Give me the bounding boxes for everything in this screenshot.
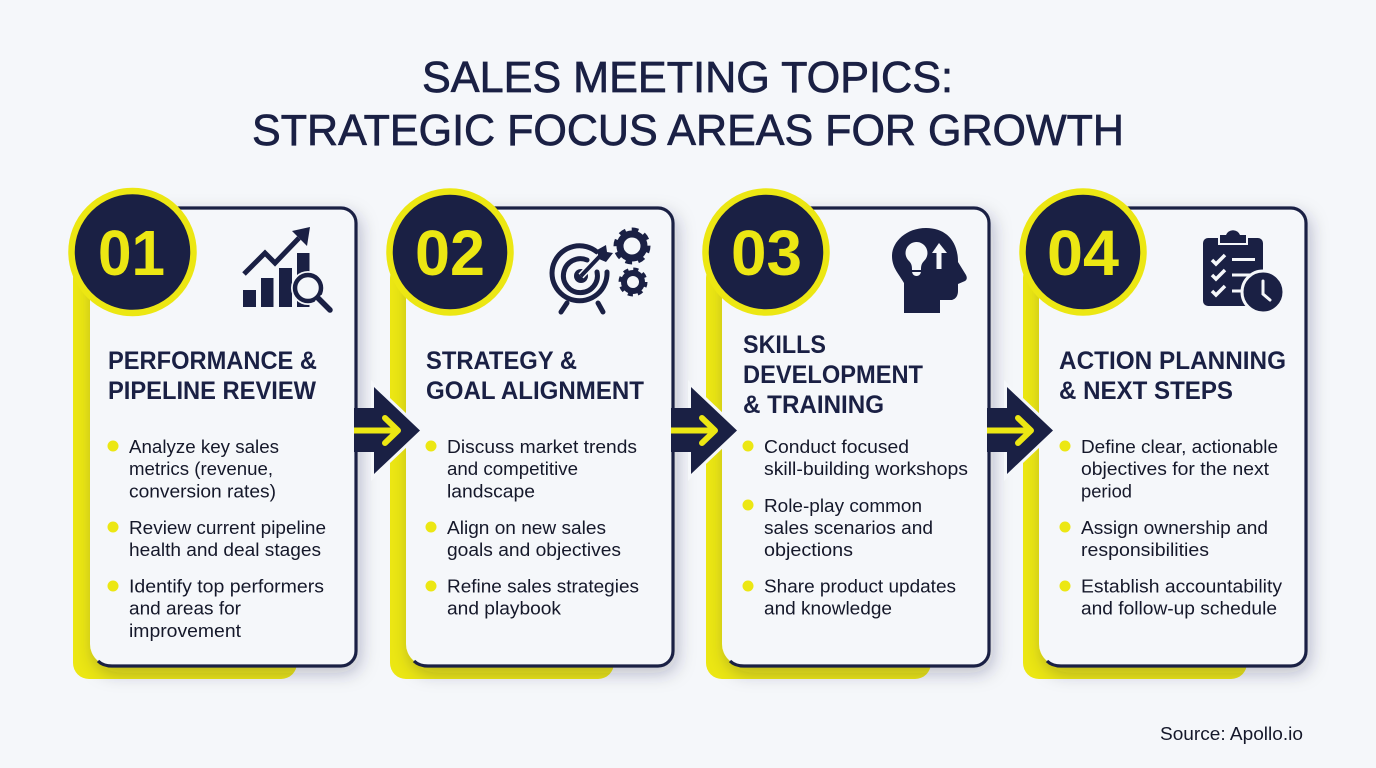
bullet list: Refine sales strategies bbox=[447, 576, 639, 596]
bullet list: Assign ownership and bbox=[1081, 517, 1268, 538]
bullet list: Analyze key sales bbox=[129, 436, 279, 457]
bullet list bbox=[108, 436, 326, 641]
bullet list: and areas for bbox=[129, 598, 241, 618]
heading: & NEXT STEPS bbox=[1059, 377, 1233, 405]
heading: SKILLS bbox=[743, 331, 826, 359]
icon: chart and magnifier bbox=[243, 227, 330, 310]
bullet list: improvement bbox=[129, 620, 241, 641]
card outline bbox=[1047, 208, 1306, 666]
title: SALES MEETING TOPICS: bbox=[422, 53, 953, 102]
heading bbox=[1059, 347, 1286, 405]
bullet list: landscape bbox=[447, 480, 535, 502]
bullet list: Align on new sales bbox=[447, 517, 606, 538]
number badge 01 bbox=[72, 191, 194, 313]
number badge 03 bbox=[706, 192, 826, 312]
panel: 04 action planning and next steps bbox=[1022, 192, 1306, 679]
bullet list: sales scenarios and bbox=[764, 517, 933, 538]
heading: ACTION PLANNING bbox=[1059, 347, 1286, 375]
bullet list: goals and objectives bbox=[447, 539, 621, 560]
bullet list: skill-building workshops bbox=[764, 458, 968, 479]
card outline bbox=[414, 208, 673, 666]
panel: 03 skills development and training bbox=[706, 192, 989, 679]
heading bbox=[426, 347, 644, 405]
bullet list: and follow-up schedule bbox=[1081, 598, 1277, 618]
title: STRATEGIC FOCUS AREAS FOR GROWTH bbox=[252, 106, 1124, 155]
bullet list bbox=[742, 436, 968, 618]
yellow backing strip bbox=[73, 262, 297, 679]
number badge 04 bbox=[1022, 192, 1144, 312]
number badge 01: 01 bbox=[98, 217, 165, 289]
heading: PERFORMANCE & bbox=[108, 347, 317, 375]
title bbox=[252, 53, 1124, 155]
icon: clipboard and clock bbox=[1203, 230, 1284, 313]
yellow backing strip bbox=[706, 262, 931, 679]
heading: DEVELOPMENT bbox=[743, 361, 923, 389]
number badge 03: 03 bbox=[731, 217, 802, 289]
heading: PIPELINE REVIEW bbox=[108, 377, 316, 405]
heading: STRATEGY & bbox=[426, 347, 577, 375]
card body bbox=[406, 207, 673, 666]
bullet list: objections bbox=[764, 539, 853, 560]
bullet list: Share product updates bbox=[764, 576, 956, 596]
card body bbox=[722, 207, 989, 666]
bullet list: objectives for the next bbox=[1081, 458, 1269, 479]
source note: Source: Apollo.io bbox=[1160, 724, 1303, 744]
bullet list: metrics (revenue, bbox=[129, 458, 273, 479]
bullet list: responsibilities bbox=[1081, 539, 1209, 560]
bullet list: Discuss market trends bbox=[447, 436, 637, 457]
card body bbox=[90, 207, 356, 666]
card outline bbox=[98, 208, 356, 666]
bullet list: and playbook bbox=[447, 598, 562, 618]
bullet list: Identify top performers bbox=[129, 576, 324, 596]
card outline bbox=[730, 208, 989, 666]
bullet list: and knowledge bbox=[764, 598, 892, 618]
bullet list: Conduct focused bbox=[764, 436, 909, 457]
bullet list: health and deal stages bbox=[129, 539, 321, 560]
bullet list: period bbox=[1081, 480, 1132, 502]
number badge 04: 04 bbox=[1047, 217, 1119, 289]
icon: head with lightbulb and arrow bbox=[892, 228, 967, 313]
icon: target and gears bbox=[552, 230, 648, 312]
bullet list: and competitive bbox=[447, 458, 578, 479]
panel: 02 strategy and goal alignment bbox=[390, 192, 673, 679]
yellow backing strip bbox=[390, 262, 614, 679]
heading bbox=[108, 347, 317, 405]
bullet list: Define clear, actionable bbox=[1081, 436, 1278, 457]
bullet list bbox=[426, 436, 639, 618]
arrow: 03 to 04 bbox=[987, 387, 1053, 474]
card body bbox=[1039, 207, 1306, 666]
bullet list: Establish accountability bbox=[1081, 576, 1283, 596]
number badge 02: 02 bbox=[415, 217, 485, 289]
yellow backing strip bbox=[1023, 262, 1247, 679]
heading: & TRAINING bbox=[743, 391, 884, 419]
bullet list: Role-play common bbox=[764, 495, 922, 516]
arrow: 02 to 03 bbox=[671, 387, 737, 474]
arrow: 01 to 02 bbox=[354, 387, 420, 474]
bullet list: Review current pipeline bbox=[129, 517, 326, 538]
heading bbox=[743, 331, 923, 419]
panel: 01 performance and pipeline review bbox=[72, 191, 356, 679]
bullet list: conversion rates) bbox=[129, 480, 276, 502]
number badge 02 bbox=[390, 192, 510, 312]
bullet list bbox=[1060, 436, 1283, 618]
heading: GOAL ALIGNMENT bbox=[426, 377, 644, 405]
